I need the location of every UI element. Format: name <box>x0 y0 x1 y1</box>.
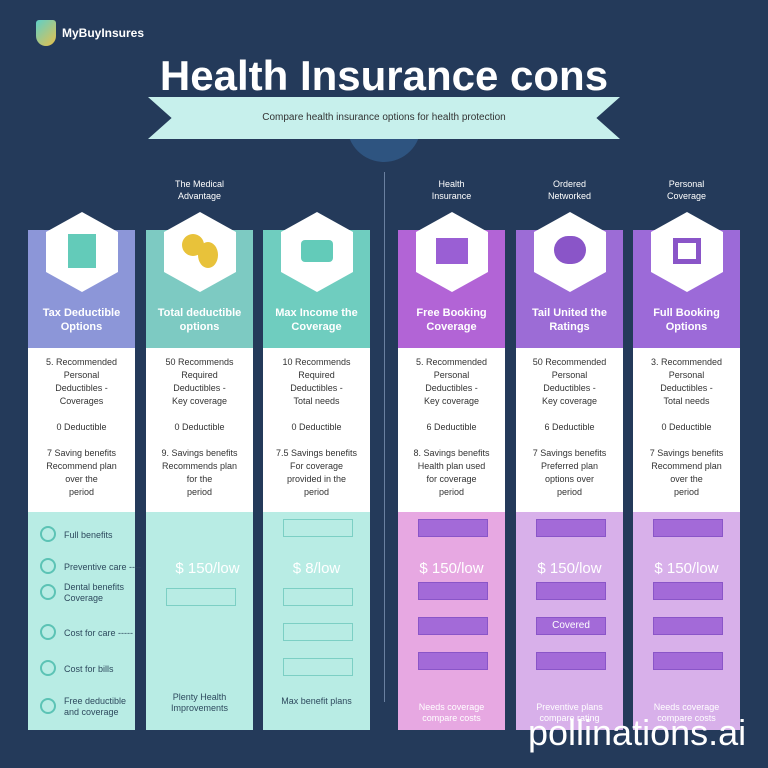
column labels: Advantage <box>178 191 221 201</box>
panel: column 1: over the <box>65 474 98 484</box>
panel: column 2: options <box>180 321 219 333</box>
panel: column 2: Recommends plan <box>162 461 237 471</box>
checklist overlay: Free deductible <box>64 696 126 706</box>
panel: column 4: period <box>439 487 464 497</box>
text: Personal <box>669 179 704 189</box>
panel: column 2 <box>146 212 253 730</box>
text: Ordered <box>553 179 586 189</box>
checklist overlay: Coverage <box>64 593 103 603</box>
text: Insurance <box>432 191 471 201</box>
panel: column 1: period <box>69 487 94 497</box>
panel: column 1: Coverages <box>60 396 103 406</box>
panel: column 6: Options <box>666 321 707 333</box>
panel: column 3: Required <box>298 370 335 380</box>
panel: column 3 <box>263 212 370 730</box>
panel: column 2: Total deductible <box>158 307 241 319</box>
icon: network <box>416 212 488 292</box>
panel: column 1: Recommend plan <box>46 461 117 471</box>
text: Health <box>438 179 464 189</box>
panel: column 5 <box>516 212 623 730</box>
panel: column 2: $ 150/low <box>175 560 240 577</box>
panel: column 5: compare rating <box>539 713 600 723</box>
panel: column 5: options over <box>545 474 594 484</box>
panel: column 2: Required <box>181 370 218 380</box>
panel: column 2: for the <box>187 474 212 484</box>
panel: column 3: Coverage <box>291 321 342 333</box>
panel: column 5: Preventive plans <box>536 702 603 712</box>
icon: building <box>46 212 118 292</box>
panel: column 5: 50 Recommended <box>533 357 606 367</box>
panel: column 5: Preferred plan <box>541 461 598 471</box>
panel: column 2: Deductibles - <box>173 383 226 393</box>
panel: column 6: 7 Savings benefits <box>650 448 723 458</box>
panel: column 2: Key coverage <box>172 396 227 406</box>
panel: column 4: compare costs <box>422 713 481 723</box>
panel: column 6: over the <box>670 474 703 484</box>
panel: column 2: period <box>187 487 212 497</box>
column labels <box>175 179 224 201</box>
panel: column 4: 8. Savings benefits <box>413 448 490 458</box>
panel: column 3: 10 Recommends <box>282 357 351 367</box>
panel: column 6: Full Booking <box>653 307 720 319</box>
panel: column 1: Personal <box>64 370 99 380</box>
column labels: The Medical <box>175 179 224 189</box>
panel: column 6: Total needs <box>663 396 710 406</box>
panel: column 6: Deductibles - <box>660 383 713 393</box>
panel: column 3: Total needs <box>293 396 340 406</box>
panel: column 1 <box>28 212 135 730</box>
checklist overlay: Cost for bills <box>64 664 114 674</box>
panel: column 4 <box>398 212 505 730</box>
panel: column 4: Personal <box>434 370 469 380</box>
panel: column 5: period <box>557 487 582 497</box>
panel: column 4: for coverage <box>426 474 477 484</box>
panel: column 1: Deductibles - <box>55 383 108 393</box>
panel: column 3: Max benefit plans <box>281 696 352 706</box>
panel: column 4: 5. Recommended <box>416 357 487 367</box>
panel: column 4: Needs coverage <box>419 702 484 712</box>
panel: column 5: 7 Savings benefits <box>533 448 606 458</box>
panel: column 2: 0 Deductible <box>174 422 225 432</box>
icon: connector <box>651 212 723 292</box>
logo <box>36 20 144 46</box>
panel: column 2: 9. Savings benefits <box>161 448 238 458</box>
panel: column 4: $ 150/low <box>419 560 484 577</box>
icon: cloud <box>534 212 606 292</box>
panel: column 3: For coverage <box>290 461 343 471</box>
panel: column 5: Tail United the <box>532 307 607 319</box>
panel: column 5: Covered <box>552 620 590 631</box>
panel: column 6: Personal <box>669 370 704 380</box>
title: Health Insurance cons <box>160 52 608 99</box>
icon: card <box>281 212 353 292</box>
panel: column 3: period <box>304 487 329 497</box>
panel: column 6: Recommend plan <box>651 461 722 471</box>
panel: column 6: period <box>674 487 699 497</box>
panel: column 5: Key coverage <box>542 396 597 406</box>
divider <box>384 172 385 702</box>
panel: column 4: Free Booking <box>416 307 487 319</box>
panel: column 3: 7.5 Savings benefits <box>276 448 357 458</box>
panel: column 1: 7 Saving benefits <box>47 448 116 458</box>
panel: column 4: Deductibles - <box>425 383 478 393</box>
panel: column 6 <box>633 212 740 730</box>
checklist overlay <box>40 526 141 717</box>
panel: column 5: $ 150/low <box>537 560 602 577</box>
panel: column 4: Coverage <box>426 321 477 333</box>
panel: column 5: Deductibles - <box>543 383 596 393</box>
banner ribbon <box>148 97 620 139</box>
panel: column 6: 0 Deductible <box>661 422 712 432</box>
panel: column 3: provided in the <box>287 474 346 484</box>
panel: column 6: compare costs <box>657 713 716 723</box>
panel: column 5: Ratings <box>549 321 590 333</box>
checklist overlay: Preventive care ---- <box>64 562 141 572</box>
center semicircle <box>347 118 421 162</box>
panel: column 2: 50 Recommends <box>165 357 234 367</box>
panel: column 4: 6 Deductible <box>426 422 477 432</box>
panel: column 1: Options <box>61 321 102 333</box>
panel: column 6: Needs coverage <box>654 702 719 712</box>
logo: MyBuyInsures <box>62 26 144 40</box>
panel: column 1: Tax Deductible <box>43 307 120 319</box>
panel: column 1: 0 Deductible <box>56 422 107 432</box>
panel: column 3: $ 8/low <box>293 560 340 577</box>
panel: column 6: $ 150/low <box>654 560 719 577</box>
panel: column 5: Personal <box>552 370 587 380</box>
text: Coverage <box>667 191 706 201</box>
panel: column 3: 0 Deductible <box>291 422 342 432</box>
panel: column 4: Key coverage <box>424 396 479 406</box>
panel: column 2: Improvements <box>171 703 228 713</box>
checklist overlay: Cost for care ----- <box>64 628 133 638</box>
panel: column 5: 6 Deductible <box>544 422 595 432</box>
panel: column 2: Plenty Health <box>173 692 226 702</box>
checklist overlay: Full benefits <box>64 530 113 540</box>
watermark: pollinations.ai <box>528 712 746 753</box>
text: Networked <box>548 191 591 201</box>
panel: column 3: Max Income the <box>275 307 358 319</box>
panel: column 3: Deductibles - <box>290 383 343 393</box>
banner ribbon: Compare health insurance options for health protection <box>262 112 506 123</box>
panel: column 6: 3. Recommended <box>651 357 722 367</box>
icon: coins <box>164 212 236 292</box>
panel: column 4: Health plan used <box>418 461 485 471</box>
checklist overlay: Dental benefits <box>64 582 124 592</box>
checklist overlay: and coverage <box>64 707 119 717</box>
panel: column 1: 5. Recommended <box>46 357 117 367</box>
